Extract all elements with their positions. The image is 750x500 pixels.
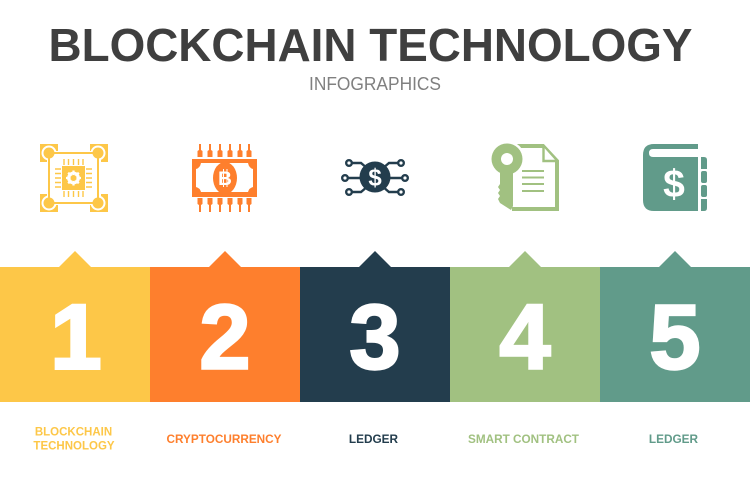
- panel: step 2: [150, 251, 300, 402]
- number 1: 1: [50, 286, 102, 388]
- panel: step 1: [0, 251, 150, 402]
- subtitle: INFOGRAPHICS: [309, 74, 441, 94]
- icon: circuit chip with gear: [40, 144, 108, 212]
- label: ledger: LEDGER: [649, 432, 699, 446]
- icon: key and document: [489, 141, 557, 210]
- icon: ledger book: $: [663, 163, 685, 206]
- number 2: 2: [199, 286, 251, 388]
- panel: step 5: [600, 251, 750, 402]
- icon: ledger book: [643, 144, 707, 211]
- label: blockchain technology: TECHNOLOGY: [33, 440, 115, 452]
- icon: dollar network: [342, 160, 408, 195]
- number 3: 3: [349, 286, 401, 388]
- icon: bitcoin banknote chip: [192, 144, 257, 212]
- label: blockchain technology: [33, 426, 115, 452]
- number 5: 5: [649, 286, 701, 388]
- label: ledger: LEDGER: [349, 432, 399, 446]
- panel: step 3: [300, 251, 450, 402]
- icon: dollar network: $: [368, 164, 382, 192]
- number 4: 4: [499, 286, 551, 388]
- title: BLOCKCHAIN TECHNOLOGY: [48, 19, 692, 71]
- label: smart contract: SMART CONTRACT: [468, 434, 579, 446]
- label: cryptocurrency: CRYPTOCURRENCY: [166, 434, 282, 446]
- icon: bitcoin banknote chip: B: [218, 169, 232, 190]
- panel: step 4: [450, 251, 600, 402]
- label: blockchain technology: BLOCKCHAIN: [35, 426, 112, 438]
